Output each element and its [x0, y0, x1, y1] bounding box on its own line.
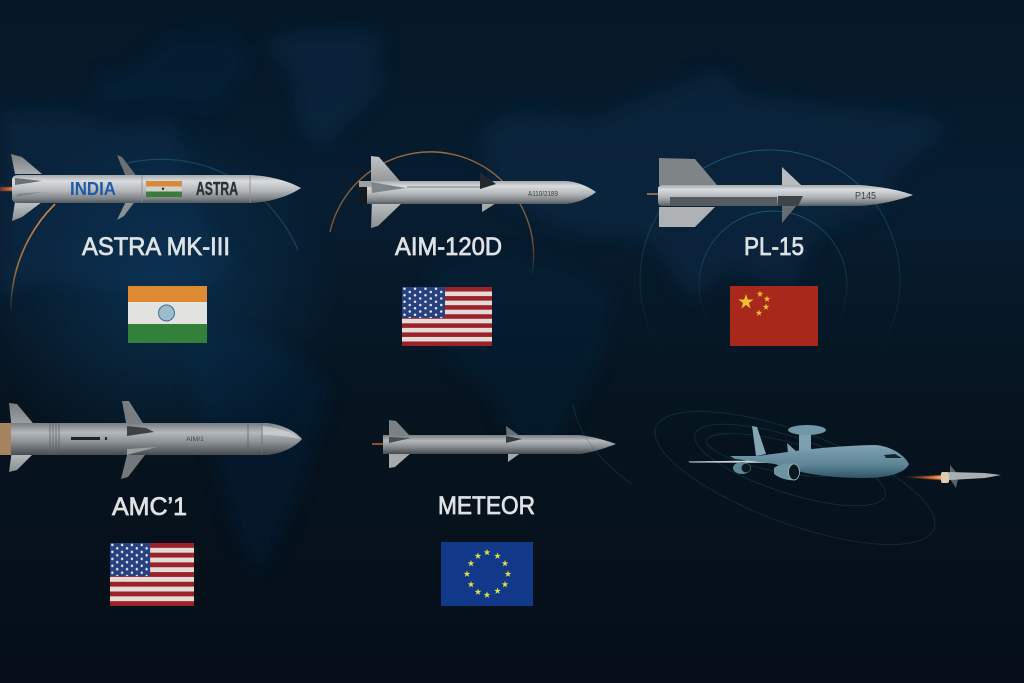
- fins: [11, 154, 139, 221]
- label: AIM-120D: [395, 233, 502, 261]
- rings: [50, 423, 248, 455]
- dark band: [670, 197, 777, 206]
- flag: USA: [402, 287, 492, 346]
- label: METEOR: [438, 492, 535, 520]
- serial: A110/2189: [528, 191, 558, 198]
- rotodome strut: [799, 433, 811, 451]
- label: AMC’1: [112, 493, 187, 521]
- backdrop arc: [0, 110, 340, 470]
- label: ASTRA MK-III: [82, 233, 230, 261]
- missile: [372, 420, 616, 468]
- missile: [0, 401, 302, 479]
- panel: Astra Mk-III: [0, 110, 340, 470]
- fins: [371, 156, 498, 228]
- exhaust: [647, 193, 659, 195]
- radar rings: [640, 150, 900, 410]
- label: PL-15: [744, 233, 804, 261]
- cockpit: [884, 454, 902, 458]
- nose highlight: [262, 426, 300, 439]
- tan motor section: [0, 423, 12, 455]
- engine rear: [733, 462, 751, 474]
- panel: AIM-120D: [330, 152, 596, 346]
- fins: [659, 158, 801, 227]
- rear fin detail: [15, 178, 42, 185]
- fuselage: [730, 445, 909, 478]
- exhaust: [372, 443, 384, 445]
- pursuing missile: [941, 465, 1001, 488]
- missile: [647, 158, 913, 227]
- body: [11, 423, 302, 455]
- nozzle: [359, 186, 368, 204]
- body: [658, 185, 913, 206]
- flag: India: [128, 286, 207, 343]
- serial: AIM/1: [186, 437, 205, 443]
- text: Astra: ASTRA: [196, 179, 238, 199]
- flame trail: [900, 475, 946, 480]
- panel: AMC'1: [0, 401, 302, 606]
- fins: [389, 420, 522, 468]
- body flag: [146, 181, 182, 197]
- missile: [359, 156, 596, 228]
- backdrop arc: [330, 152, 534, 278]
- mid fin roots: [127, 426, 154, 436]
- orbit lines: [573, 384, 950, 572]
- exhaust flame: [0, 187, 14, 191]
- flag: USA: [110, 543, 194, 606]
- tail fin: [752, 426, 766, 456]
- text: India: INDIA: [70, 179, 116, 199]
- body: [367, 181, 596, 204]
- world map backdrop: [0, 30, 950, 575]
- panel: PL-15: [640, 150, 913, 410]
- wing streak: [688, 460, 783, 463]
- body: [383, 435, 616, 454]
- flag: EU: [441, 542, 533, 606]
- slit: [71, 437, 100, 440]
- flag: China: [730, 286, 818, 346]
- aircraft: [688, 425, 909, 480]
- body: [12, 175, 301, 203]
- section line: [142, 175, 250, 203]
- engine front: [774, 463, 795, 480]
- rotodome: [788, 425, 826, 435]
- serial: P145: [855, 191, 876, 202]
- fins: [9, 401, 146, 479]
- small fin: [787, 443, 797, 453]
- missile: [0, 154, 301, 221]
- panel: Meteor: [372, 420, 616, 606]
- panel: AWACS engagement: [573, 384, 1001, 572]
